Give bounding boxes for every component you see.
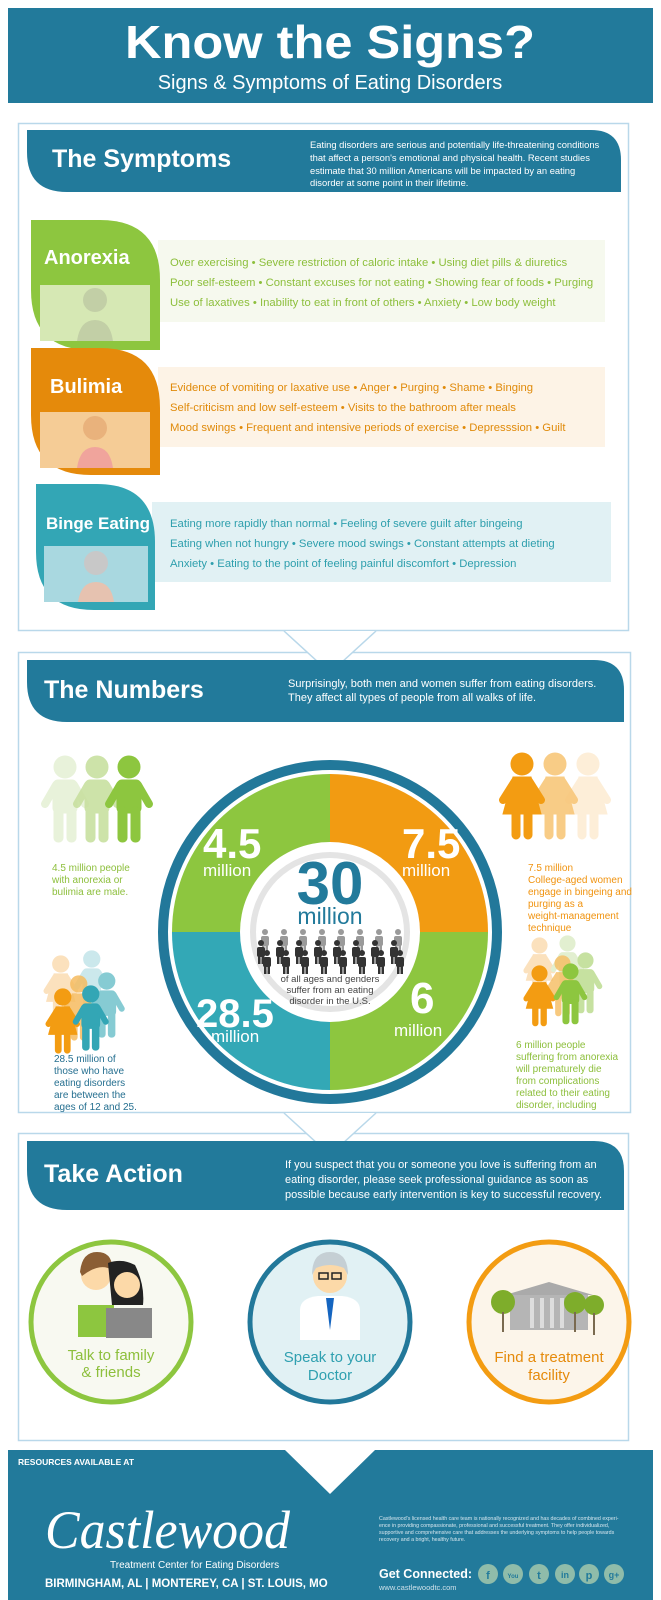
circle: talk to family: & friends <box>81 1364 141 1381</box>
text: about <box>379 1516 619 1543</box>
text: get connected: Get Connected: <box>379 1567 472 1581</box>
text: get connected <box>378 1567 472 1592</box>
text: mortality stat: related to their eating <box>516 1088 610 1099</box>
chart: 30 million circle: of all ages and genders <box>281 974 380 985</box>
chart: 30 million circle <box>163 765 497 1099</box>
text: mortality stat: disorder, including <box>516 1100 597 1111</box>
text: male stat: bulimia are male. <box>52 887 128 898</box>
text: get connected: www.castlewoodtc.com <box>378 1583 457 1592</box>
circle: find treatment facility: facility <box>528 1367 570 1384</box>
bulimia block <box>31 348 605 475</box>
icon: women group <box>503 753 607 839</box>
logo: Castlewood: Treatment Center for Eating Disorders <box>110 1560 279 1571</box>
anorexia block: Use of laxatives • Inability to eat in front of others • Anxiety • Low body weight <box>170 297 556 309</box>
bulimia block: Evidence of vomiting or laxative use • Anger • Purging • Shame • Binging <box>170 382 533 394</box>
binge eating block: Eating more rapidly than normal • Feeling of severe guilt after bingeing <box>170 518 522 530</box>
chart: 30 million circle: million <box>211 1027 259 1046</box>
circle: find treatment facility: Find a treatment <box>494 1349 604 1366</box>
chart: 30 million circle: 6 <box>410 974 434 1023</box>
text: mortality stat: suffering from anorexia <box>516 1052 619 1063</box>
symptoms header <box>27 130 621 192</box>
text: women stat: weight-management <box>527 911 619 922</box>
text: ages stat: those who have <box>54 1066 124 1077</box>
take action header: possible because early intervention is key to successful recovery. <box>285 1189 602 1201</box>
binge eating block: Binge Eating <box>46 514 150 533</box>
icon: mixed group ages <box>46 951 122 1053</box>
text: women stat: engage in bingeing and <box>528 887 632 898</box>
bulimia block: Mood swings • Frequent and intensive periods of exercise • Depresssion • Guilt <box>170 422 566 434</box>
footer: RESOURCES AVAILABLE AT <box>18 1457 135 1467</box>
text: mortality stat: 6 million people <box>516 1040 586 1051</box>
circle: talk to family: Talk to family <box>68 1347 155 1364</box>
chart: 30 million circle: million <box>402 861 450 880</box>
panel: take action <box>18 1113 629 1440</box>
chart: 30 million circle: 7.5 <box>402 820 460 867</box>
text: about: ence in providing compassionate, professional and successful treatment. They offer individualized, <box>379 1523 609 1529</box>
icons: social <box>478 1564 624 1584</box>
binge eating block <box>36 484 611 610</box>
chart: 30 million circle: suffer from an eating <box>287 985 373 996</box>
arrow from symptoms panel <box>284 631 376 673</box>
bulimia block: Bulimia <box>50 376 123 398</box>
circle: speak to doctor: Doctor <box>308 1367 352 1384</box>
arrow from numbers panel <box>284 1113 376 1155</box>
symptoms header: that affect a person's emotional and physical health. Recent studies <box>310 152 590 163</box>
panel: the numbers <box>18 631 632 1113</box>
icons: social: in <box>561 1570 569 1580</box>
text: women stat: College-aged women <box>528 875 623 886</box>
panel: symptoms <box>18 124 628 630</box>
anorexia block: Poor self-esteem • Constant excuses for not eating • Showing fear of foods • Purging <box>170 277 593 289</box>
text: women stat: purging as a <box>528 899 583 910</box>
numbers header: The Numbers <box>44 676 204 704</box>
logo: Castlewood: BIRMINGHAM, AL | MONTEREY, CA | ST. LOUIS, MO <box>45 1578 328 1590</box>
text: women stat <box>527 863 632 934</box>
icons: social: f <box>486 1570 490 1582</box>
binge eating block: Anxiety • Eating to the point of feeling painful discomfort • Depression <box>170 558 516 570</box>
text: mortality stat <box>515 1040 619 1111</box>
text: male stat <box>51 863 130 898</box>
circle: find treatment facility <box>469 1242 629 1402</box>
text: women stat: 7.5 million <box>528 863 573 874</box>
text: ages stat: ages of 12 and 25. <box>54 1102 137 1113</box>
icons: social: You <box>508 1574 519 1580</box>
circle: speak to doctor: Speak to your <box>284 1349 376 1366</box>
footer <box>8 1450 653 1600</box>
header banner <box>8 8 653 103</box>
text: male stat: 4.5 million people <box>52 863 130 874</box>
chart: 30 million circle: disorder in the U.S. <box>289 996 371 1007</box>
icons: social: g+ <box>609 1570 619 1580</box>
take action header: eating disorder, please seek professional guidance as soon as <box>285 1174 589 1186</box>
circle: speak to doctor <box>250 1242 410 1402</box>
symptoms header: disorder at some point in their lifetime. <box>310 177 468 188</box>
take action header: If you suspect that you or someone you love is suffering from an <box>285 1159 597 1171</box>
icon: men group <box>45 756 149 842</box>
chart: 30 million circle: 4.5 <box>203 820 261 867</box>
text: ages stat: 28.5 million of <box>54 1054 116 1065</box>
symptoms header: The Symptoms <box>52 145 231 173</box>
numbers header: They affect all types of people from all walks of life. <box>288 692 536 704</box>
title: Know the Signs? <box>125 16 535 68</box>
text: about: supportive and comprehensive care that addresses the underlying symptoms to help people towards <box>379 1530 615 1536</box>
icon: mortality group <box>526 936 600 1026</box>
icons: social: p <box>586 1570 593 1582</box>
logo: Castlewood <box>45 1500 328 1590</box>
text: mortality stat: will prematurely die <box>515 1064 602 1075</box>
text: about: recovery and a bright, healthy future. <box>379 1537 465 1543</box>
icons: social: t <box>537 1570 541 1582</box>
bulimia block: Self-criticism and low self-esteem • Visits to the bathroom after meals <box>170 402 516 414</box>
numbers header <box>27 660 624 722</box>
chart: 30 million circle: million <box>297 903 363 929</box>
chart: 30 million circle: 30 <box>297 850 363 917</box>
text: mortality stat: from complications <box>516 1076 599 1087</box>
text: ages stat: eating disorders <box>54 1078 125 1089</box>
text: ages stat <box>54 1054 137 1113</box>
text: women stat: technique <box>528 923 572 934</box>
chart: 30 million circle: million <box>394 1021 442 1040</box>
anorexia block <box>31 220 605 350</box>
subtitle: Signs & Symptoms of Eating Disorders <box>158 72 502 94</box>
take action header <box>27 1141 624 1210</box>
anorexia block: Anorexia <box>44 247 130 269</box>
chart: 30 million circle: 28.5 <box>196 992 274 1036</box>
text: about: Castlewood's licensed health care team is nationally recognized and has decades of combined experi- <box>379 1516 619 1522</box>
logo: Castlewood: Castlewood <box>45 1500 291 1560</box>
binge eating block: Eating when not hungry • Severe mood swings • Constant attempts at dieting <box>170 538 555 550</box>
text: ages stat: are between the <box>54 1090 126 1101</box>
circle: talk to family <box>31 1242 191 1402</box>
symptoms header: estimate that 30 million Americans will be impacted by an eating <box>310 165 575 176</box>
arrow into footer <box>285 1450 375 1494</box>
symptoms header: Eating disorders are serious and potentially life-threatening conditions <box>310 139 600 150</box>
text: male stat: with anorexia or <box>51 875 123 886</box>
chart: 30 million circle: million <box>203 861 251 880</box>
take action header: Take Action <box>44 1160 183 1188</box>
anorexia block: Over exercising • Severe restriction of caloric intake • Using diet pills & diuretics <box>170 257 568 269</box>
numbers header: Surprisingly, both men and women suffer from eating disorders. <box>288 678 596 690</box>
